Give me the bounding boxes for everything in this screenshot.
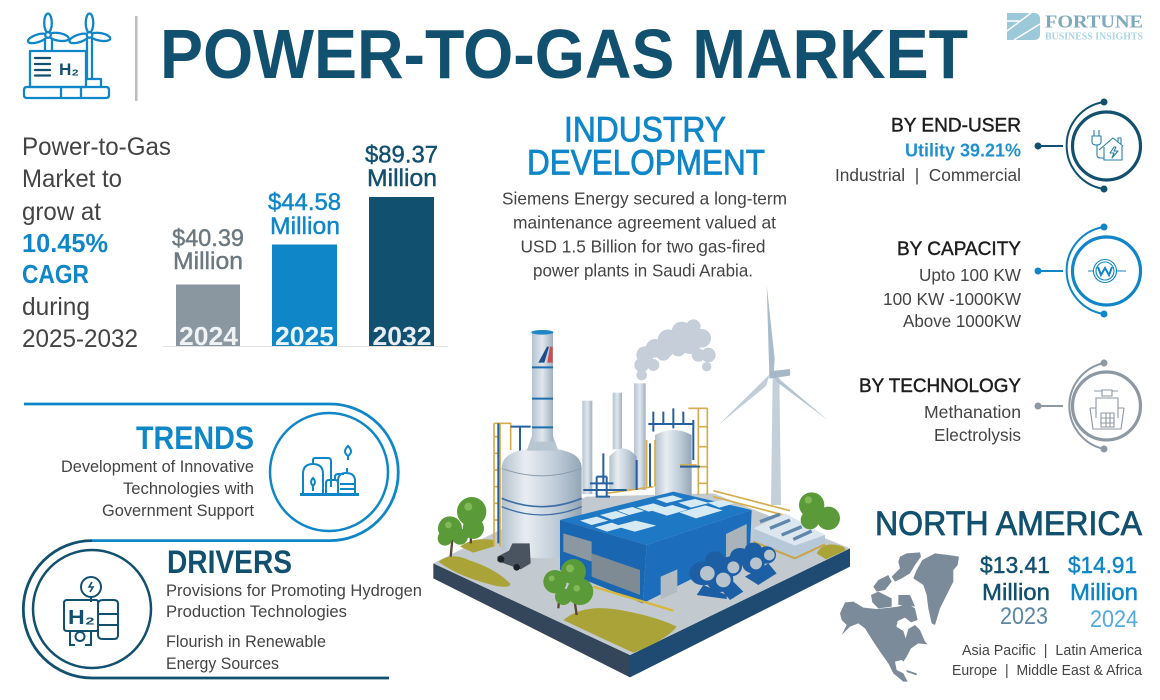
logo: Fortune Business Insights	[1007, 12, 1143, 42]
trends text: Development of Innovative	[61, 458, 254, 476]
by technology text: Electrolysis	[934, 425, 1021, 445]
scaffolds and pipes	[494, 408, 790, 547]
bar 2025: 2025	[275, 321, 334, 351]
by end-user text: BY END-USER	[891, 114, 1021, 136]
truck	[497, 543, 531, 571]
CAGR text block: grow at	[22, 198, 101, 226]
north america values 2024: 2024	[1090, 606, 1138, 633]
north america values 2023: 2023	[1000, 603, 1048, 630]
by capacity text	[883, 238, 1021, 331]
drivers text: Energy Sources	[166, 655, 279, 673]
trends outline	[24, 404, 398, 541]
bar 2024	[172, 225, 244, 351]
icon: gas plant	[270, 413, 388, 531]
trees	[438, 492, 840, 615]
heading: industry development: DEVELOPMENT	[527, 144, 765, 182]
by capacity text: 100 KW -1000KW	[883, 289, 1021, 309]
industry development text: power plants in Saudi Arabia.	[533, 260, 753, 280]
CAGR text block: during	[22, 293, 90, 321]
north america values 2024: Million	[1070, 579, 1138, 605]
panel: trends	[24, 404, 398, 541]
bar 2032: Million	[367, 165, 437, 192]
north america values 2023	[980, 552, 1050, 630]
trends text: Technologies with	[123, 480, 254, 498]
panel: drivers	[23, 541, 422, 678]
CAGR text block: Power-to-Gas	[22, 133, 171, 161]
industry development text: maintenance agreement valued at	[513, 212, 776, 232]
compressor skid	[753, 513, 825, 562]
wind turbine	[718, 285, 828, 505]
industry development text: USD 1.5 Billion for two gas-fired	[520, 236, 766, 256]
north america values 2024: $14.91	[1068, 552, 1137, 578]
logo: Fortune Business Insights: BUSINESS INSIGHTS	[1045, 32, 1143, 42]
heading: industry development: INDUSTRY	[564, 110, 726, 150]
heading: industry development	[527, 110, 765, 182]
bar 2024: Million	[173, 248, 243, 275]
by end-user text	[835, 114, 1021, 185]
other regions list	[952, 642, 1143, 679]
by capacity text: Upto 100 KW	[919, 265, 1021, 285]
illustration: power-to-gas plant	[433, 285, 850, 677]
blue drum units	[689, 543, 777, 600]
header divider	[135, 16, 138, 101]
CAGR text block: 10.45%	[22, 228, 108, 258]
smoke plume	[634, 319, 716, 380]
by technology text: Methanation	[924, 402, 1021, 422]
drivers text: Provisions for Promoting Hydrogen	[166, 582, 422, 600]
drivers text	[166, 582, 422, 673]
H2 label: H₂	[59, 60, 79, 79]
platform base	[433, 563, 630, 677]
bar 2024: 2024	[179, 321, 239, 351]
other regions list: Europe | Middle East & Africa	[952, 662, 1143, 679]
stacks	[582, 401, 592, 494]
bar 2025: $44.58	[268, 189, 341, 216]
main reactor tank	[502, 330, 582, 558]
by technology text: BY TECHNOLOGY	[859, 375, 1021, 397]
bar 2032: $89.37	[365, 142, 438, 168]
blue building	[560, 492, 752, 603]
by capacity text: Above 1000KW	[903, 311, 1021, 331]
industry development text	[502, 188, 787, 280]
bar 2025: Million	[270, 213, 340, 240]
north america values 2024	[1068, 552, 1138, 633]
drivers heading: DRIVERS	[167, 544, 292, 580]
CAGR text block: Market to	[22, 165, 122, 193]
industry development text: Siemens Energy secured a long-term	[502, 188, 787, 208]
north america values 2023: $13.41	[980, 552, 1050, 578]
rear tanks	[655, 430, 692, 498]
CAGR text block: 2025-2032	[22, 325, 138, 353]
logo: Fortune Business Insights: FORTUNE	[1045, 12, 1143, 32]
trends text: Government Support	[102, 502, 254, 520]
icon: wind turbines with H2 building	[24, 14, 111, 98]
by capacity text: BY CAPACITY	[897, 238, 1021, 260]
trends text	[61, 458, 254, 520]
other regions list: Asia Pacific | Latin America	[962, 642, 1143, 659]
title: POWER-TO-GAS MARKET	[160, 15, 968, 93]
trends heading: TRENDS	[136, 420, 254, 456]
drivers outline	[23, 541, 389, 678]
by technology text	[859, 375, 1021, 445]
bar 2032: 2032	[372, 321, 432, 351]
CAGR text block	[22, 133, 171, 353]
drivers text: Production Technologies	[166, 603, 347, 621]
grass patches	[438, 539, 846, 653]
north america values 2023: Million	[982, 579, 1050, 605]
icon: capacity ring	[1035, 224, 1140, 317]
bar chart: market size	[163, 142, 448, 351]
by end-user text: Industrial | Commercial	[835, 165, 1021, 185]
icon: hydrogen tank	[33, 550, 151, 668]
icon: end-user ring	[1035, 99, 1140, 192]
by end-user text: Utility 39.21%	[905, 140, 1021, 160]
icon: technology ring	[1035, 360, 1140, 452]
bar 2032	[365, 142, 438, 351]
CAGR text block: CAGR	[22, 259, 89, 289]
region heading: north america: NORTH AMERICA	[875, 505, 1142, 543]
bar 2025	[268, 189, 341, 351]
drivers text: Flourish in Renewable	[166, 633, 326, 651]
bar 2024: $40.39	[172, 225, 244, 252]
map: north america	[840, 552, 959, 682]
icon: hydrogen tank: H₂	[68, 607, 95, 629]
